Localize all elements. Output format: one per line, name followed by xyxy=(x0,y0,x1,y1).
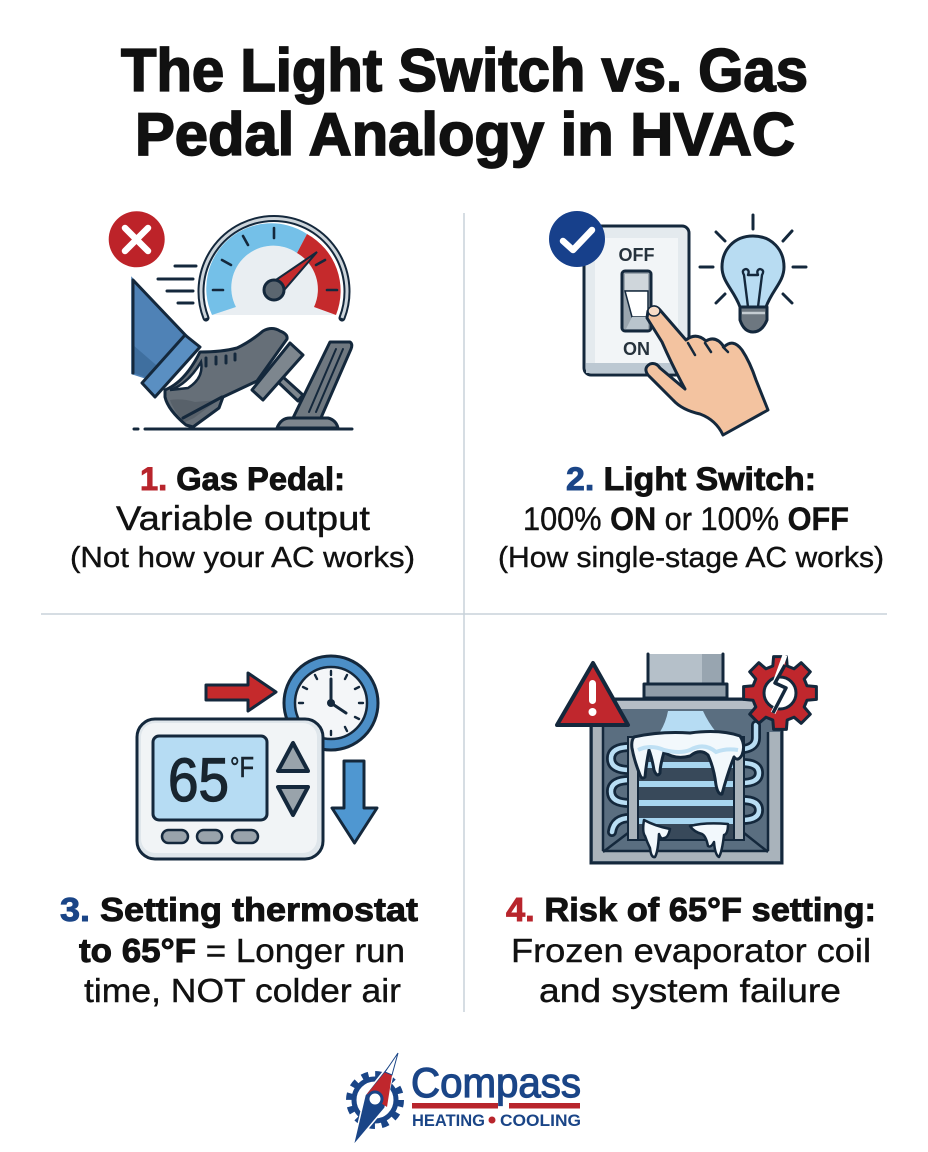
icon: gas pedal and speedometer xyxy=(109,211,352,429)
icon: thermostat with clock and arrows xyxy=(137,656,378,859)
panel: thermostat xyxy=(60,656,418,1009)
pedals xyxy=(278,377,303,401)
gauge xyxy=(201,218,347,318)
text: light switch: (How single-stage AC works) xyxy=(498,542,884,574)
logo tagline xyxy=(412,1111,581,1130)
icon: light bulb xyxy=(700,215,806,332)
title xyxy=(121,37,808,168)
fins xyxy=(628,737,744,840)
trouser cuff xyxy=(142,335,200,397)
airflow xyxy=(660,711,716,732)
text: frozen coil xyxy=(506,891,876,1009)
logo tagline: HEATING xyxy=(412,1111,485,1130)
icon: hand xyxy=(646,307,768,435)
text: thermostat: to 65°F = Longer run xyxy=(79,932,405,969)
text: frozen coil: 4. Risk of 65°F setting: xyxy=(506,891,876,928)
logo gear xyxy=(350,1074,400,1126)
switch plate xyxy=(584,226,689,375)
panel: gas pedal xyxy=(70,211,415,574)
shoe xyxy=(165,328,287,427)
blue arrow xyxy=(332,761,377,843)
text: frozen coil: Frozen evaporator coil xyxy=(511,932,871,969)
logo wordmark: Compass xyxy=(411,1059,581,1106)
text: light switch: 100% ON or 100% OFF xyxy=(523,501,849,537)
icon: light switch and bulb xyxy=(549,211,806,435)
title: Pedal Analogy in HVAC xyxy=(135,101,795,168)
reading: °F xyxy=(230,752,254,784)
speed lines xyxy=(158,266,196,303)
icon: frozen evaporator coil xyxy=(557,654,816,863)
text: frozen coil: and system failure xyxy=(539,972,841,1009)
logo compass needle xyxy=(353,1053,398,1146)
text: light switch: 2. Light Switch: xyxy=(566,461,816,497)
panel: frozen coil xyxy=(506,654,876,1009)
thermostat body xyxy=(137,719,323,859)
reading: 65 xyxy=(168,746,229,814)
screen xyxy=(153,736,267,820)
icon: broken gear xyxy=(744,655,816,729)
red arrow xyxy=(206,673,276,711)
icon: check badge xyxy=(549,211,605,267)
text: gas pedal: (Not how your AC works) xyxy=(70,542,415,574)
title: The Light Switch vs. Gas xyxy=(121,37,808,104)
clock xyxy=(284,656,378,750)
logo: Compass Heating and Cooling xyxy=(350,1053,581,1146)
logo bar xyxy=(412,1103,580,1108)
ice xyxy=(632,732,744,857)
logo tagline: COOLING xyxy=(500,1111,581,1130)
text: thermostat: 3. Setting thermostat xyxy=(60,891,418,928)
panel: light switch xyxy=(498,211,884,574)
duct xyxy=(644,654,727,698)
text: gas pedal: 1. Gas Pedal: xyxy=(140,461,345,497)
text: gas pedal: Variable output xyxy=(116,500,371,538)
text: light switch xyxy=(498,461,884,574)
pill buttons xyxy=(162,830,258,843)
text: thermostat xyxy=(60,891,418,1009)
label OFF: OFF xyxy=(618,245,654,265)
toggle xyxy=(622,271,651,331)
cabinet xyxy=(591,699,782,863)
trouser leg xyxy=(133,280,190,377)
label ON: ON xyxy=(623,339,650,359)
icon: warning triangle xyxy=(557,663,628,725)
coil tubes xyxy=(611,725,759,832)
text: thermostat: time, NOT colder air xyxy=(84,972,401,1009)
up and down buttons xyxy=(278,743,308,815)
icon: red cross badge xyxy=(109,211,165,267)
text: gas pedal xyxy=(70,461,415,574)
